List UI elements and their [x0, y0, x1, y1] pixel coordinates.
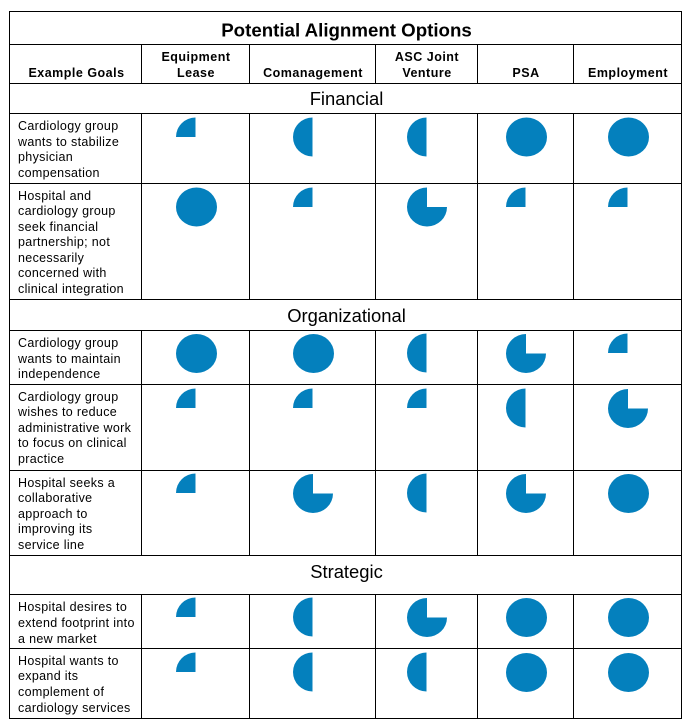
goal text: cardiology group [18, 204, 116, 218]
icon: three-quarter pie [506, 334, 546, 373]
header: example goals: Example Goals [28, 66, 125, 80]
row: expand cardiology services [18, 652, 649, 715]
icon: full pie [506, 598, 547, 637]
section heading: organizational: Organizational [287, 305, 406, 326]
row: extend footprint [18, 598, 649, 646]
header: employment: Employment [588, 66, 668, 80]
row: collaborative approach [18, 474, 649, 552]
icon: full pie [176, 188, 217, 226]
header: ASC joint venture: Venture [402, 66, 452, 80]
icon: three-quarter pie [407, 188, 447, 226]
icon: quarter pie [293, 188, 312, 207]
goal text: Cardiology group [18, 119, 118, 133]
title: Potential Alignment Options [221, 20, 472, 40]
header: equipment lease: Lease [177, 66, 215, 80]
goal text: concerned with [18, 266, 107, 280]
goal text: partnership; not [18, 235, 110, 249]
column headers [28, 50, 668, 80]
icon: quarter pie [608, 188, 628, 207]
goal text: to focus on clinical [18, 436, 127, 450]
icon: full pie [608, 598, 649, 637]
icon: half pie [407, 652, 426, 692]
goal text: wants to stabilize [17, 135, 119, 149]
goal text: collaborative [18, 491, 92, 505]
goal text: wants to maintain [17, 352, 121, 366]
icon: quarter pie [176, 598, 196, 617]
goal text: compensation [18, 166, 100, 180]
goal text: Hospital wants to [18, 654, 119, 668]
header: comanagement: Comanagement [263, 66, 363, 80]
goal text: approach to [18, 507, 88, 521]
goal text: practice [18, 452, 64, 466]
section heading: financial: Financial [310, 88, 383, 109]
goal text: seek financial [18, 220, 98, 234]
icon: quarter pie [293, 388, 312, 408]
header: equipment lease [161, 50, 231, 80]
icon: half pie [407, 118, 426, 156]
goal text: extend footprint into [18, 616, 135, 630]
goal text: clinical integration [18, 282, 124, 296]
goal text: Hospital desires to [18, 600, 127, 614]
icon: half pie [407, 474, 426, 512]
icon: quarter pie [176, 474, 196, 493]
icon: half pie [293, 652, 312, 692]
icon: half pie [407, 334, 426, 372]
icon: quarter pie [608, 334, 628, 353]
row: financial partnership [18, 188, 628, 296]
goal text: improving its [18, 522, 92, 536]
goal text: expand its [18, 669, 78, 683]
goal text: administrative work [18, 421, 132, 435]
icon: half pie [293, 118, 312, 156]
icon: quarter pie [506, 188, 526, 207]
icon: three-quarter pie [506, 474, 546, 513]
icon: quarter pie [176, 118, 196, 137]
icon: three-quarter pie [293, 474, 333, 513]
icon: half pie [506, 388, 526, 428]
icon: three-quarter pie [608, 389, 648, 428]
header: ASC joint venture: ASC Joint [395, 50, 459, 64]
row: maintain independence [17, 334, 628, 381]
header: equipment lease: Equipment [161, 50, 231, 64]
icon: half pie [293, 598, 312, 636]
icon: quarter pie [407, 388, 426, 408]
icon: full pie [608, 653, 649, 692]
goal text: Cardiology group [18, 336, 118, 350]
section heading: strategic: Strategic [310, 561, 383, 582]
goal text: independence [18, 367, 101, 381]
icon: full pie [293, 334, 334, 373]
icon: full pie [176, 334, 217, 373]
goal text: service line [18, 538, 84, 552]
icon: full pie [506, 653, 547, 692]
icon: full pie [608, 474, 649, 513]
goal text: complement of [18, 685, 104, 699]
icon: full pie [506, 118, 547, 156]
row: stabilize physician compensation [17, 118, 649, 180]
goal text: physician [18, 150, 73, 164]
icon: quarter pie [176, 652, 196, 672]
icon: three-quarter pie [407, 598, 447, 637]
goal text: Hospital and [18, 189, 91, 203]
header: PSA: PSA [512, 66, 540, 80]
goal text: wishes to reduce [17, 405, 117, 419]
header: ASC joint venture [395, 50, 459, 80]
goal text: necessarily [18, 251, 85, 265]
icon: quarter pie [176, 388, 196, 408]
goal text: Cardiology group [18, 390, 118, 404]
goal text: cardiology services [18, 701, 131, 715]
row: reduce administrative work [17, 388, 648, 466]
goal text: a new market [18, 632, 97, 646]
goal text: Hospital seeks a [18, 476, 115, 490]
icon: full pie [608, 118, 649, 156]
